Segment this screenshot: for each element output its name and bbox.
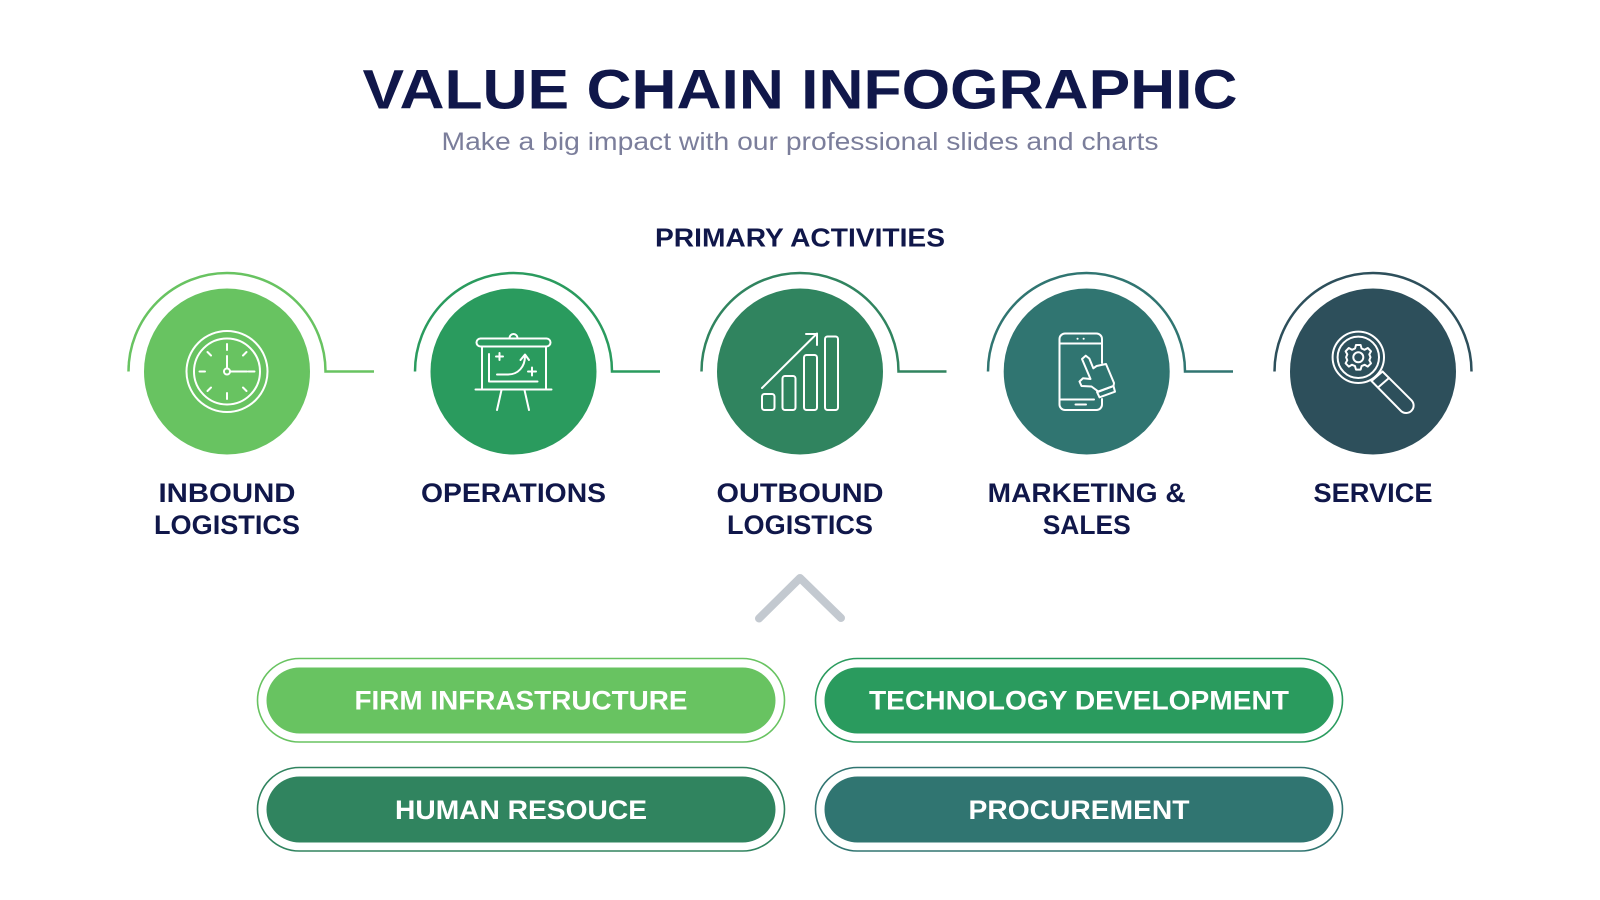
pill: procurement: PROCUREMENT (968, 795, 1190, 825)
panel: inbound logistics (128, 273, 374, 540)
label: MARKETING & (988, 478, 1186, 508)
title: VALUE CHAIN INFOGRAPHIC (362, 58, 1238, 120)
pill: technology development: TECHNOLOGY DEVELOPMENT (869, 686, 1290, 716)
pill: procurement (816, 768, 1342, 851)
label: LOGISTICS (727, 510, 873, 540)
icon: phone with hand (1060, 334, 1115, 410)
circle (717, 288, 883, 454)
panel: outbound logistics (702, 273, 946, 540)
icon: growth bar chart (762, 334, 838, 410)
arc and connector (415, 273, 660, 372)
label: OUTBOUND (716, 478, 884, 508)
arc and connector (702, 273, 946, 372)
pill: human resouce: HUMAN RESOUCE (395, 795, 647, 825)
label: SERVICE (1314, 478, 1432, 508)
arrow: chevron up (759, 578, 841, 618)
label (154, 478, 300, 540)
arc (1274, 273, 1472, 372)
label: INBOUND (158, 478, 296, 508)
arc and connector (128, 273, 374, 372)
circle (1004, 288, 1170, 454)
panel: operations (415, 273, 660, 508)
panel: service (1274, 273, 1472, 508)
pill: firm infrastructure (258, 658, 784, 742)
circle (1290, 288, 1456, 454)
label: LOGISTICS (154, 510, 300, 540)
circle (144, 288, 310, 454)
heading: primary activities: PRIMARY ACTIVITIES (655, 222, 945, 252)
pill: firm infrastructure: FIRM INFRASTRUCTURE (354, 686, 688, 716)
icon: presentation board (476, 334, 552, 410)
label: SALES (1043, 510, 1131, 540)
label (988, 478, 1186, 540)
icon: clock (186, 331, 268, 412)
subtitle: Make a big impact with our professional slides and charts (442, 128, 1158, 156)
icon: magnifier with gear (1333, 332, 1414, 413)
label (716, 478, 884, 540)
label: OPERATIONS (421, 478, 606, 508)
pill: technology development (816, 658, 1342, 742)
arc and connector (988, 273, 1233, 372)
pill: human resouce (258, 768, 784, 851)
circle (430, 288, 596, 454)
panel: marketing and sales (988, 273, 1233, 540)
